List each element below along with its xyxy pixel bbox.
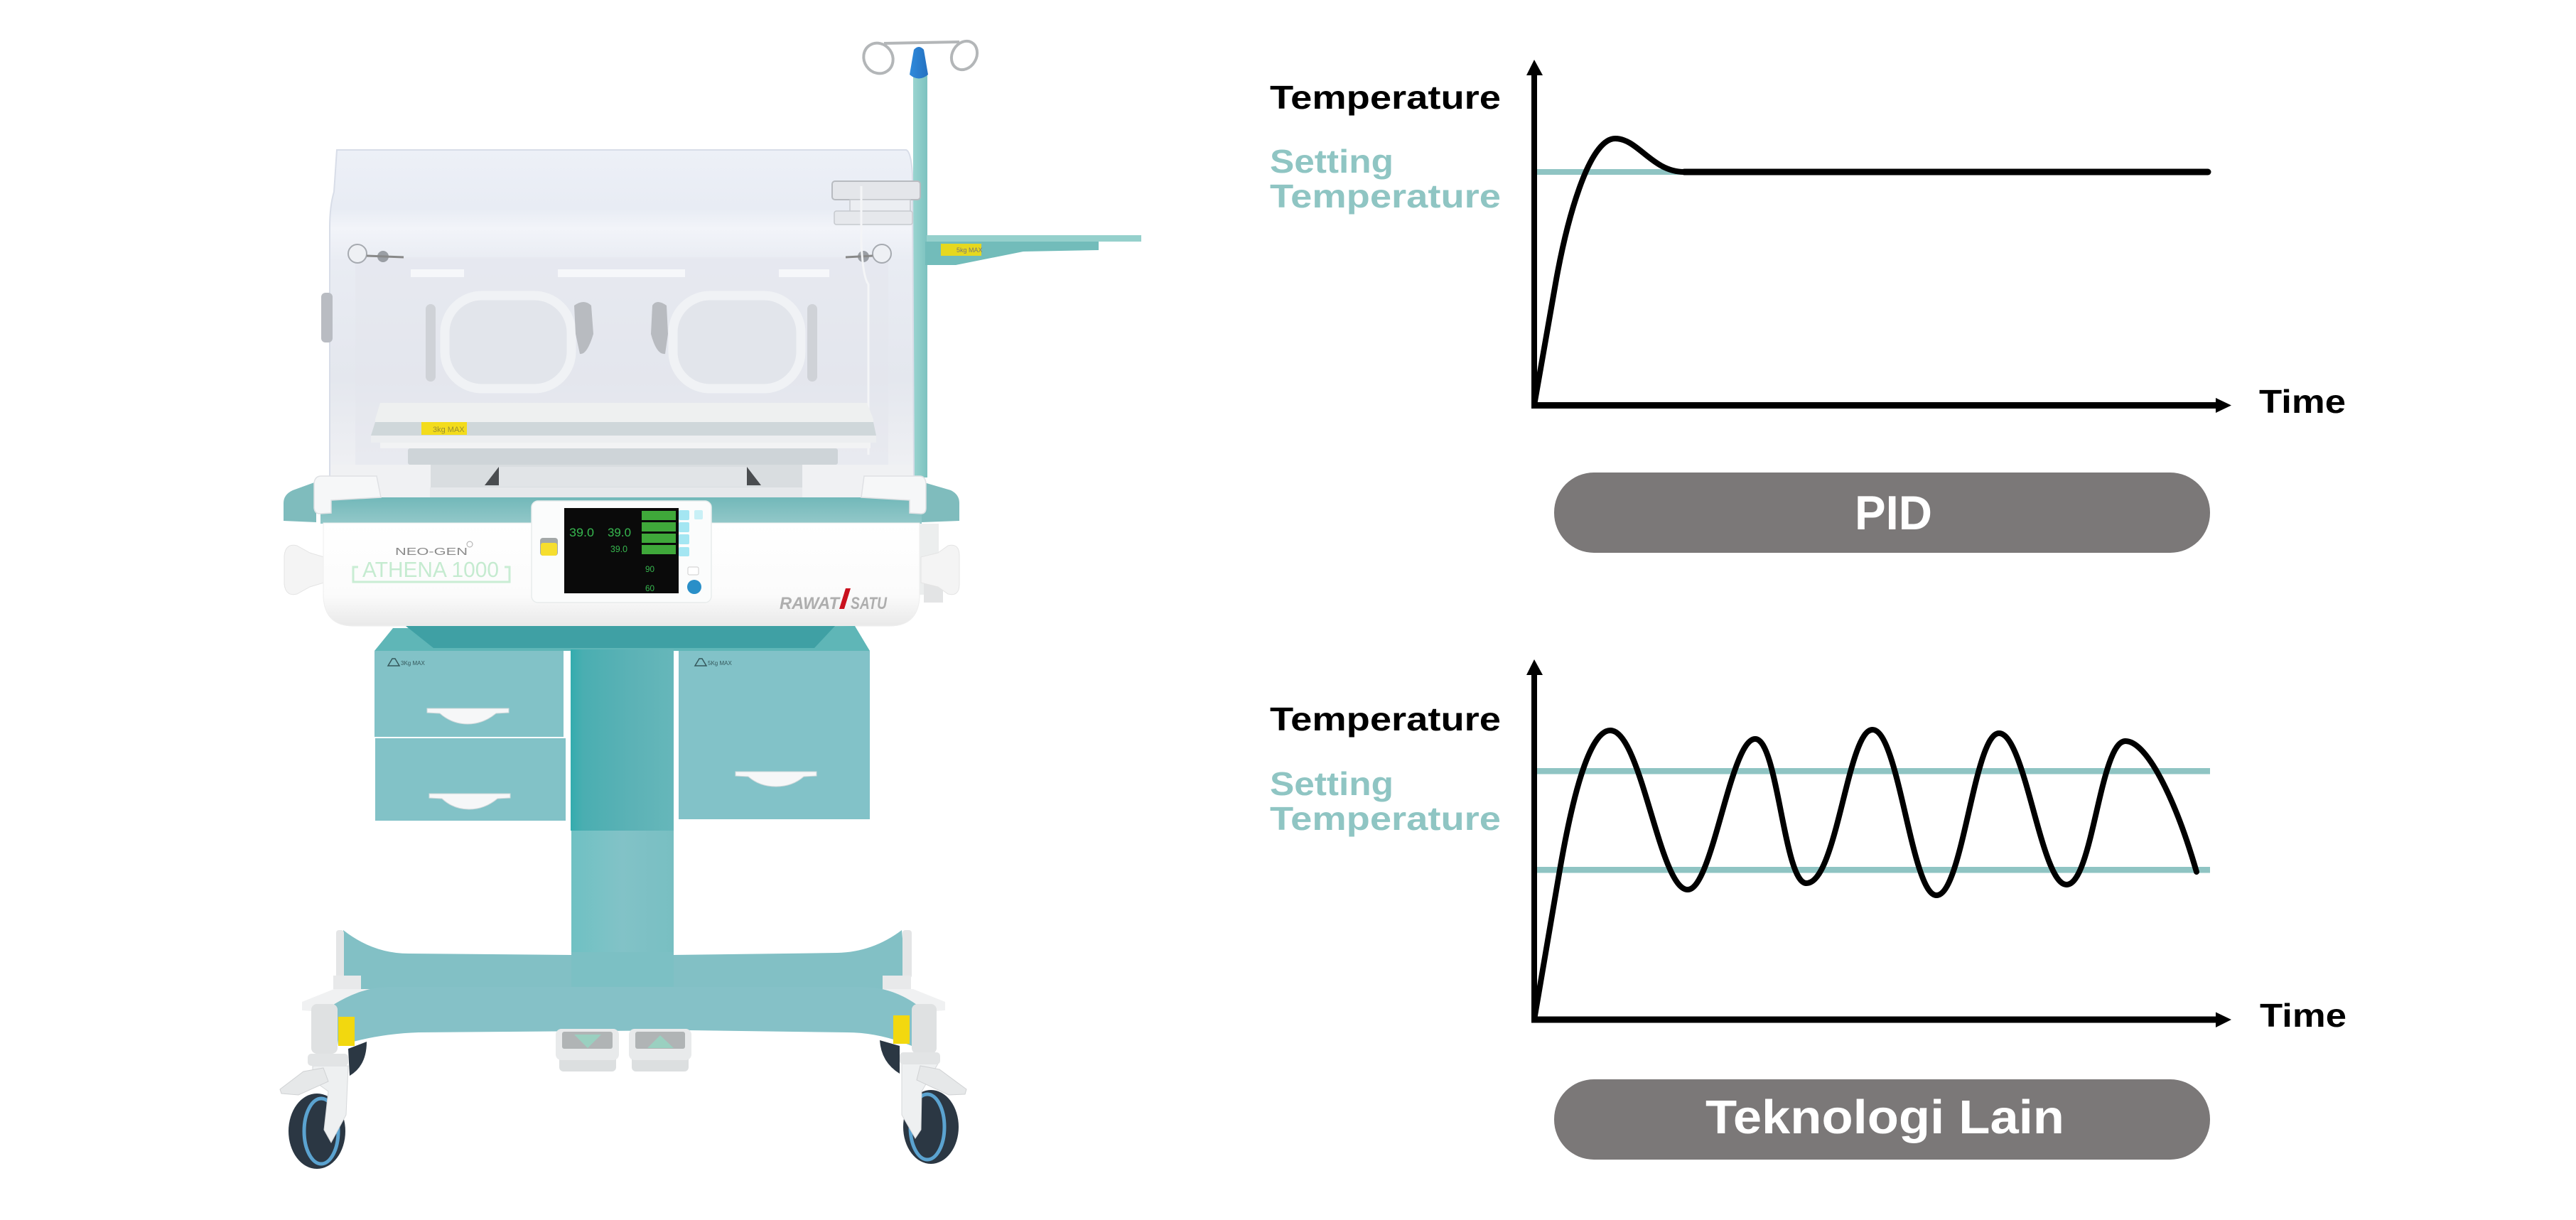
axis labels: [1270, 79, 2346, 420]
screen: 39.0: [610, 544, 627, 554]
rear casters: [348, 1040, 900, 1076]
product name logo: NEO-GEN: [395, 546, 468, 558]
left front caster: [280, 1054, 348, 1169]
axes: [1526, 60, 2231, 413]
front base bar: [311, 987, 937, 1054]
white control housing: [323, 501, 920, 626]
right front caster: [900, 1052, 966, 1164]
axis labels: Time: [2260, 997, 2346, 1034]
label pill: PID: PID: [1855, 486, 1932, 540]
sensor module: [832, 181, 920, 455]
transparent hood: [321, 150, 920, 497]
axis labels: Setting: [1270, 143, 1394, 180]
screen: [564, 508, 679, 593]
right drawer: 5Kg MAX: [708, 660, 732, 666]
brand logo: [780, 588, 888, 613]
column foot shade: [571, 952, 674, 988]
mattress tray: [331, 403, 912, 497]
side keys: [679, 510, 689, 556]
foot pedals: [556, 1029, 691, 1071]
screen: 39.0: [608, 526, 631, 539]
mattress tray: 3kg MAX: [433, 426, 465, 434]
axis labels: Temperature: [1270, 800, 1501, 837]
screen: 60: [645, 583, 654, 593]
axis labels: Setting: [1270, 765, 1394, 802]
brand logo: SATU: [851, 594, 888, 613]
settled line: [1684, 169, 2208, 175]
product name logo: [353, 541, 510, 582]
yellow button: [540, 538, 558, 556]
hinges: [348, 244, 891, 263]
axes: [1526, 659, 2231, 1027]
axis labels: Temperature: [1270, 701, 1501, 738]
left drawers: 3Kg MAX: [401, 660, 425, 666]
side tray: 5kg MAX: [956, 247, 983, 254]
right drawer: [679, 651, 870, 819]
label pill: PID: [1554, 473, 2210, 553]
screen: 90: [645, 564, 654, 574]
chart: other technology temperature response: [1270, 659, 2346, 1034]
response curve: [1534, 139, 2208, 405]
central column: [571, 649, 674, 984]
drawer cabinet top: [374, 626, 870, 651]
teal rail and handles: [284, 476, 959, 524]
brand logo: RAWAT: [780, 594, 841, 613]
axis labels: Time: [2259, 383, 2346, 420]
setpoint line: [1537, 169, 1693, 175]
side brackets and knobs: [284, 524, 959, 603]
oscillating curve: [1534, 730, 2197, 1020]
axis labels: Temperature: [1270, 79, 1501, 116]
hood strips: [411, 269, 829, 277]
display panel: [532, 501, 711, 603]
axis labels: Temperature: [1270, 178, 1501, 215]
left drawers: [374, 651, 566, 821]
label pill: Teknologi Lain: Teknologi Lain: [1705, 1091, 2064, 1144]
label pill: Teknologi Lain: [1554, 1079, 2210, 1160]
setpoint band lines: [1537, 768, 2210, 873]
rear base bar: [302, 930, 945, 1013]
incubator product illustration: [280, 36, 1141, 1169]
product name logo: ATHENA 1000: [362, 557, 499, 582]
side tray: [925, 235, 1141, 265]
axis labels: [1270, 701, 2346, 1034]
screen: 39.0: [569, 526, 594, 539]
IV pole with hook: [858, 36, 982, 477]
right access port: [651, 296, 817, 389]
left access port: [426, 296, 593, 389]
chart: PID temperature response: [1270, 60, 2346, 420]
